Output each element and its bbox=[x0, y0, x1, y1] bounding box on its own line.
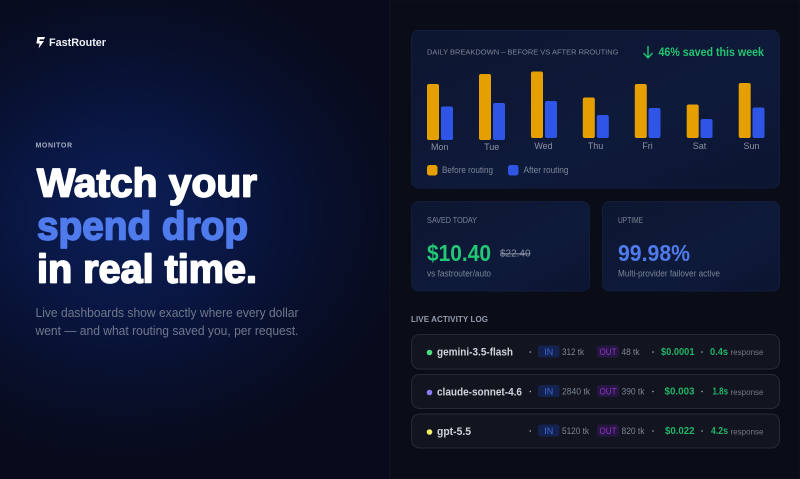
cost: $0.003 bbox=[664, 386, 695, 398]
output badge: OUT bbox=[600, 386, 617, 396]
output tokens: 820 tk bbox=[622, 426, 645, 436]
panel: saved today bbox=[412, 202, 590, 291]
stat value: $10.40 bbox=[427, 240, 491, 266]
bars: Mon bbox=[427, 84, 453, 140]
panel: log row gpt bbox=[412, 414, 780, 448]
legend: After routing bbox=[524, 165, 568, 175]
legend bbox=[427, 165, 568, 176]
bars: Thu bbox=[583, 98, 609, 138]
output badge: OUT bbox=[600, 347, 617, 357]
bar chart bbox=[427, 72, 764, 140]
day labels: Mon bbox=[431, 142, 449, 152]
title line 2 accent: spend drop bbox=[37, 204, 248, 248]
title line 3: in real time. bbox=[37, 248, 257, 292]
input badge bbox=[538, 424, 560, 436]
day labels: Thu bbox=[588, 141, 603, 151]
logo: FastRouter bbox=[36, 37, 107, 49]
title line 1: Watch your bbox=[37, 162, 257, 206]
latency: 1.8s bbox=[712, 386, 728, 398]
savings callout: 46% saved this week bbox=[658, 47, 765, 59]
section heading: live activity log: LIVE ACTIVITY LOG bbox=[411, 315, 488, 324]
day labels: Tue bbox=[484, 142, 499, 152]
panel: log row gemini bbox=[412, 334, 780, 369]
model name: gemini-3.5-flash bbox=[437, 346, 513, 358]
day labels: Sat bbox=[693, 141, 707, 151]
bars: Fri bbox=[635, 84, 660, 138]
panel: log row claude bbox=[412, 374, 780, 408]
status dot bbox=[427, 390, 432, 395]
stat caption: vs fastrouter/auto bbox=[427, 268, 491, 278]
strikethrough previous value: $22.40 bbox=[500, 248, 531, 260]
chart card bbox=[412, 30, 780, 188]
day labels: Sun bbox=[743, 141, 760, 151]
bars: Tue bbox=[479, 74, 505, 140]
input tokens: 2840 tk bbox=[562, 386, 590, 396]
input tokens: 5120 tk bbox=[562, 426, 589, 436]
day labels: Wed bbox=[534, 141, 553, 151]
input badge: IN bbox=[544, 426, 553, 436]
panel: uptime bbox=[602, 202, 780, 291]
panel: left hero background bbox=[0, 0, 390, 479]
status dot bbox=[427, 350, 432, 355]
latency: 0.4s bbox=[710, 347, 728, 358]
panel: daily breakdown chart bbox=[412, 30, 780, 188]
input badge bbox=[538, 385, 560, 397]
day labels bbox=[431, 141, 760, 152]
latency: 4.2s bbox=[711, 426, 728, 437]
logo wordmark: FastRouter bbox=[49, 37, 107, 49]
response label: response bbox=[730, 387, 764, 397]
bars: Sat bbox=[687, 104, 712, 138]
description line 1: Live dashboards show exactly where every dollar bbox=[36, 306, 298, 320]
output tokens: 48 tk bbox=[622, 347, 640, 357]
panel: right dashboard background bbox=[390, 0, 800, 479]
response label: response bbox=[730, 426, 764, 436]
model name: claude-sonnet-4.6 bbox=[437, 386, 522, 398]
input badge bbox=[538, 346, 560, 358]
stat label: SAVED TODAY bbox=[427, 215, 477, 225]
description line 2: went — and what routing saved you, per request. bbox=[35, 324, 298, 338]
cost: $0.0001 bbox=[661, 347, 695, 358]
input tokens: 312 tk bbox=[562, 347, 584, 357]
bars: Wed bbox=[531, 72, 557, 138]
description text bbox=[35, 306, 298, 338]
output tokens: 390 tk bbox=[622, 386, 645, 396]
output badge: OUT bbox=[600, 426, 617, 436]
stat label: UPTIME bbox=[618, 215, 643, 225]
eyebrow label: MONITOR bbox=[36, 142, 72, 150]
cost: $0.022 bbox=[665, 426, 695, 437]
icon: down arrow bbox=[644, 46, 652, 58]
input badge: IN bbox=[544, 347, 553, 357]
icon: lightning bolt bbox=[36, 37, 45, 48]
input badge: IN bbox=[544, 386, 553, 396]
day labels: Fri bbox=[642, 141, 653, 151]
stat caption: Multi-provider failover active bbox=[618, 268, 720, 278]
response label: response bbox=[730, 347, 764, 357]
chart heading: DAILY BREAKDOWN – BEFORE VS AFTER RROUTING bbox=[427, 48, 619, 56]
title bbox=[37, 162, 257, 292]
status dot bbox=[427, 429, 432, 435]
model name: gpt-5.5 bbox=[437, 426, 471, 438]
stat value: 99.98% bbox=[618, 240, 690, 266]
bars: Sun bbox=[739, 83, 764, 138]
legend: Before routing bbox=[442, 165, 493, 175]
